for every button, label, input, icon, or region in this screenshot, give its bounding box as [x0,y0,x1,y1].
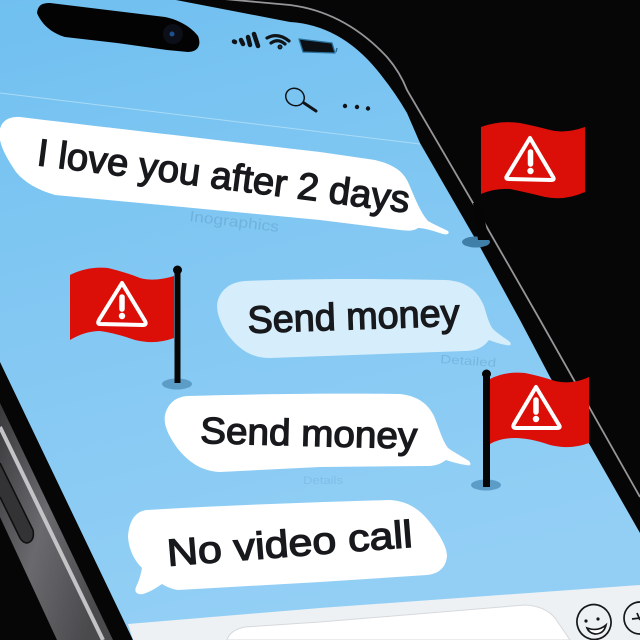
bubble: I love you after 2 days [0,117,449,234]
icon: add button [624,602,640,634]
icon: search [283,85,316,111]
icon: battery [299,39,337,53]
phone: top right rim [147,0,640,497]
icon: more dots [343,104,370,111]
icon: warning triangle [98,283,146,325]
ghost label: Infographics: Inographics [189,208,280,236]
message text: Send money [247,293,460,342]
phone: side button [0,463,33,543]
flag 2: left [70,266,192,390]
message text: I love you after 2 days [35,132,412,222]
input field [227,605,570,640]
message text: Send money [200,410,418,457]
bubble: Send money (white) [165,394,470,472]
flag 1: on bezel [462,122,585,248]
ghost label: Details lower: Details [303,475,344,487]
ghost label: Details: Detailed [440,352,497,370]
bubble: No video call [128,500,447,594]
message text: No video call [165,514,414,575]
phone: metal side frame [0,403,113,640]
status bar icons [234,34,337,53]
flag 3: right [471,370,589,490]
icon: warning triangle [513,387,560,428]
camera lens [163,24,183,44]
icon: smiley [572,600,616,640]
camera notch [37,3,199,52]
bubble: Send money (light) [217,279,511,358]
header divider [0,93,420,144]
icon: wifi [267,36,289,48]
icon: signal bars [234,34,258,46]
input bar [128,585,640,640]
icon: warning triangle [506,138,554,180]
